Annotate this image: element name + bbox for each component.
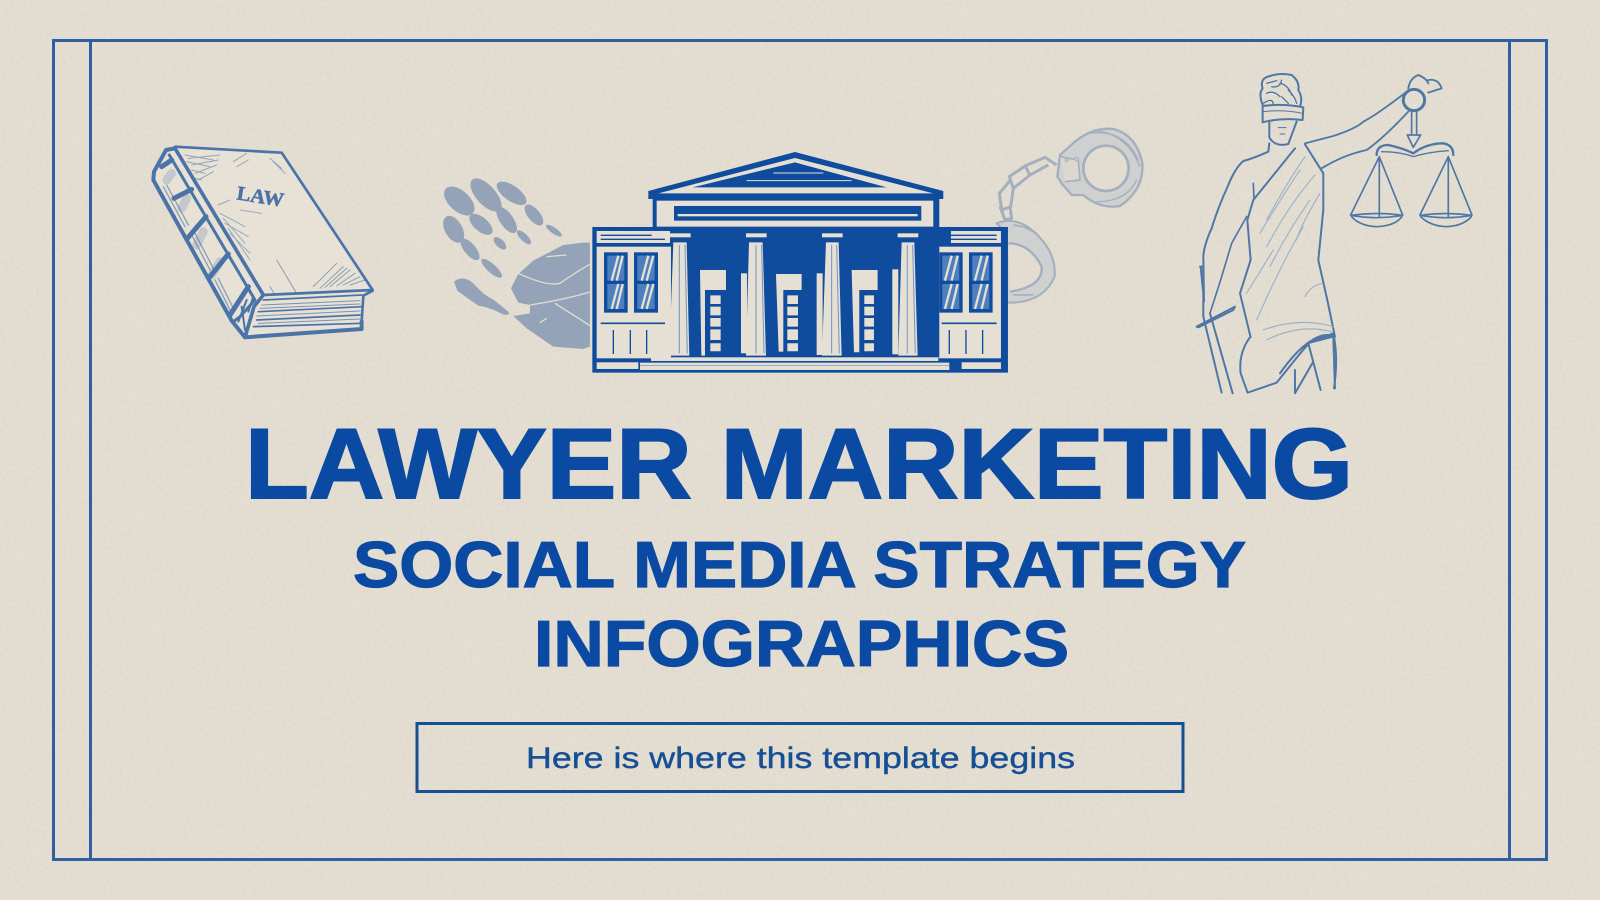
scale hanger	[1403, 89, 1425, 111]
upper cuff	[1057, 129, 1142, 207]
title: LAWYER MARKETING	[245, 408, 1353, 519]
icon: law book	[153, 147, 373, 337]
chain	[999, 157, 1057, 220]
robe	[1240, 144, 1335, 373]
columns	[669, 233, 918, 356]
lower cuff	[997, 221, 1055, 303]
torso and left arm	[1203, 143, 1269, 302]
illustration: lady justice	[1197, 74, 1472, 393]
raised arm and hand	[1305, 75, 1442, 168]
subtitle box: Here is where this template begins	[526, 742, 1075, 775]
dark portico	[671, 229, 939, 358]
icon: courthouse	[592, 152, 1008, 373]
beam	[1377, 143, 1453, 155]
right pan	[1420, 157, 1472, 227]
subtitle line one: SOCIAL MEDIA STRATEGY	[353, 528, 1246, 601]
sword	[1197, 267, 1235, 393]
attic	[653, 199, 939, 229]
subtitle box	[417, 724, 1183, 792]
icon: handprint	[439, 173, 592, 349]
head	[1260, 74, 1303, 145]
subtitle line two: INFOGRAPHICS	[534, 607, 1069, 680]
steps	[640, 357, 949, 370]
icon: handcuffs	[997, 129, 1142, 303]
pediment	[648, 152, 943, 199]
doors	[700, 269, 898, 356]
leg and lower figure	[1240, 337, 1336, 393]
right wing	[938, 231, 1001, 369]
left pan	[1351, 157, 1403, 227]
main facade	[592, 227, 1008, 373]
left wing	[597, 231, 671, 369]
icon: law book: LAW	[235, 183, 285, 212]
